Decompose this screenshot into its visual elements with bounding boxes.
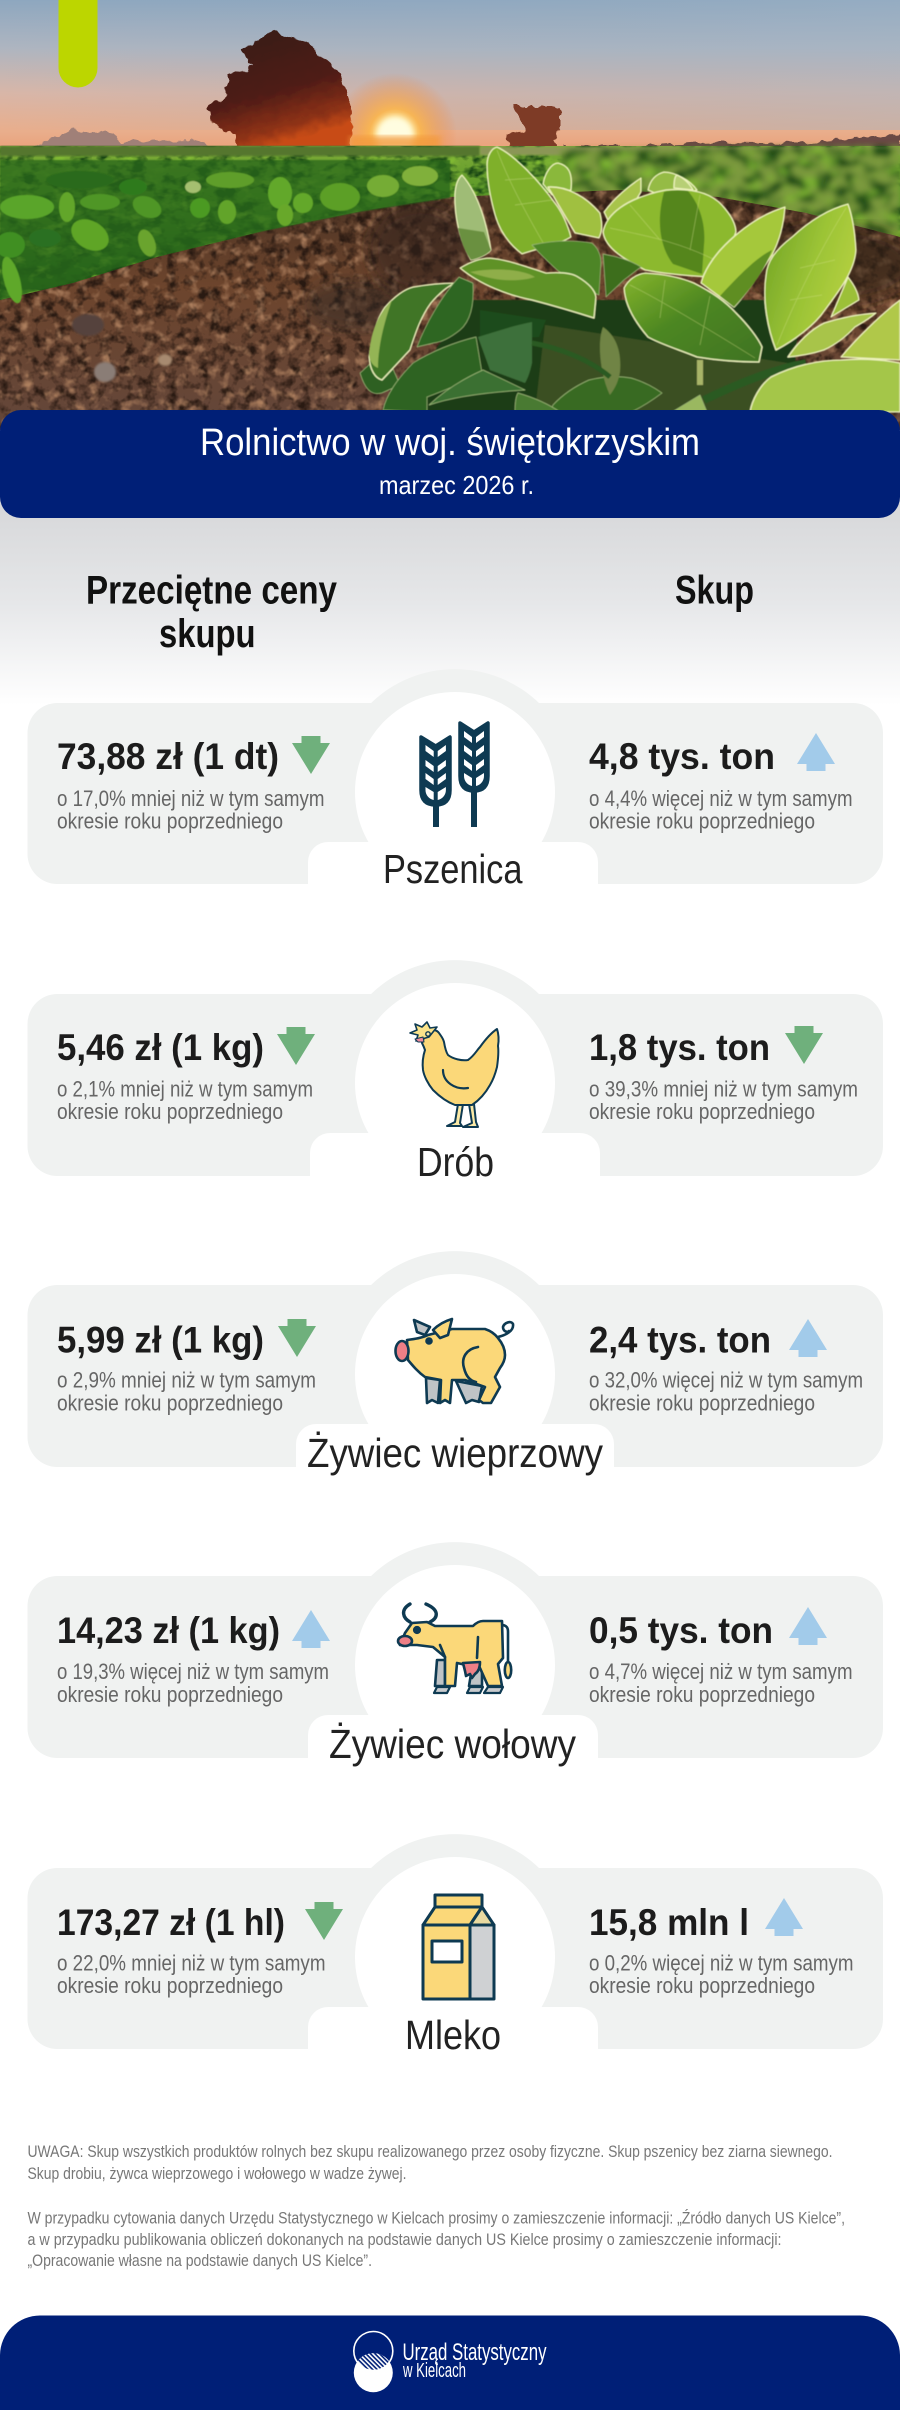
card shape [28,1542,883,1765]
citation text: „Opracowanie własne na podstawie danych US Kielce”. [28,2251,372,2270]
category label: Żywiec wołowy [329,1721,576,1767]
price description [57,1076,313,1124]
arrow down [305,1902,343,1940]
purchase description: o 39,3% mniej niż w tym samym [589,1076,858,1102]
right field rows [560,146,900,245]
purchase description [589,1368,863,1416]
price description: o 22,0% mniej niż w tym samym [57,1950,326,1976]
category label: Drób [417,1139,494,1185]
card shape [28,1834,883,2057]
background gradient under banner [0,480,900,705]
price description: o 2,9% mniej niż w tym samym [57,1368,316,1392]
price value: 14,23 zł (1 kg) [57,1610,280,1651]
left crop row leaves [0,160,450,305]
price value: 5,99 zł (1 kg) [57,1320,264,1360]
price value: 5,46 zł (1 kg) [57,1027,264,1068]
category label: Mleko [405,2012,501,2058]
panel: pigs [28,1251,883,1476]
panel: poultry [28,960,883,1185]
purchase description: okresie roku poprzedniego [589,808,815,834]
purchase description [589,786,852,834]
category label: Pszenica [383,846,523,892]
column heading: purchase: Skup [675,568,754,612]
panel: cattle [28,1542,883,1767]
price value: 73,88 zł (1 dt) [57,736,279,777]
price description: okresie roku poprzedniego [57,1099,283,1124]
arrow up [789,1319,827,1357]
arrow down [278,1319,316,1357]
icon: chicken [410,1022,499,1127]
purchase description: okresie roku poprzedniego [589,1390,815,1416]
purchase value: 4,8 tys. ton [589,736,775,777]
price description [57,1950,326,1998]
title banner [0,410,900,518]
card shape [28,1251,883,1474]
purchase description [589,1659,852,1707]
price description: o 19,3% więcej niż w tym samym [57,1659,329,1684]
price description [57,1659,329,1707]
icon: cow [398,1604,511,1693]
soybean plant leaves [360,147,900,430]
citation text: a w przypadku publikowania obliczeń dokonanych na podstawie danych US Kielce prosimy o zamieszczenie informacji: [28,2230,782,2249]
office name: Urząd Statystyczny [402,2339,546,2366]
purchase description: o 4,4% więcej niż w tym samym [589,786,852,811]
price value: 173,27 zł (1 hl) [57,1902,285,1943]
icon: milk carton [423,1895,494,1999]
panel: wheat [28,669,883,892]
note text [28,2142,832,2183]
price description: okresie roku poprzedniego [57,1390,283,1416]
purchase description: o 0,2% więcej niż w tym samym [589,1950,854,1976]
arrow up [765,1898,803,1936]
arrow down [785,1026,823,1064]
purchase description: okresie roku poprzedniego [589,1682,815,1707]
column heading: prices [86,568,338,656]
title: Rolnictwo w woj. świętokrzyskim [200,422,700,464]
purchase value: 2,4 tys. ton [589,1320,771,1360]
arrow down [277,1027,315,1065]
panel: milk [28,1834,883,2058]
price description: okresie roku poprzedniego [57,1682,283,1707]
price description [57,1368,316,1416]
logo [354,2332,393,2392]
price description: okresie roku poprzedniego [57,1973,283,1998]
arrow up [789,1607,827,1645]
green tab accent [58,0,98,88]
purchase description: okresie roku poprzedniego [589,1099,815,1124]
arrow up [797,733,835,771]
price description: o 17,0% mniej niż w tym samym [57,786,324,811]
note text: Skup drobiu, żywca wieprzowego i wołowego w wadze żywej. [28,2164,406,2183]
purchase description: o 4,7% więcej niż w tym samym [589,1659,852,1684]
card shape [28,669,883,892]
subtitle: marzec 2026 r. [379,470,534,500]
icon: wheat [421,723,488,827]
column heading: prices: skupu [159,612,256,656]
purchase description [589,1076,858,1124]
purchase description [589,1950,854,1998]
column heading: prices: Przeciętne ceny [86,568,338,612]
purchase value: 1,8 tys. ton [589,1027,770,1068]
purchase description: okresie roku poprzedniego [589,1973,815,1998]
purchase value: 15,8 mln l [589,1902,749,1943]
arrow up [292,1610,330,1648]
category label: Żywiec wieprzowy [307,1430,603,1476]
purchase value: 0,5 tys. ton [589,1610,773,1651]
price description: okresie roku poprzedniego [57,808,283,834]
footer [0,2316,900,2410]
price description [57,786,324,834]
header photo: soybean field at sunset [0,0,900,430]
icon: pig [396,1319,513,1403]
citation text [28,2208,845,2270]
arrow down [292,736,330,774]
price description: o 2,1% mniej niż w tym samym [57,1076,313,1102]
card shape [28,960,883,1183]
office city: w Kielcach [402,2360,466,2382]
